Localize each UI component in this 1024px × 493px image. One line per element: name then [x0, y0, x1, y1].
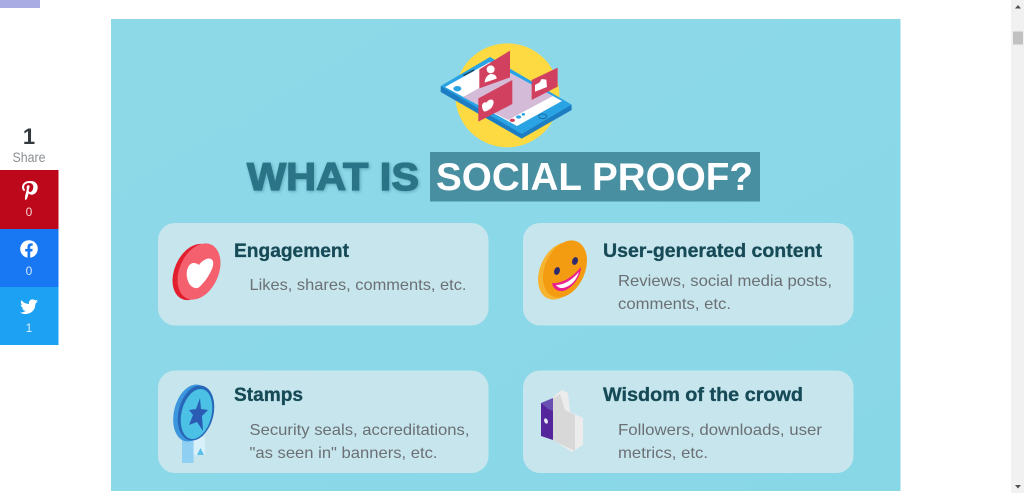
share label: Share: [12, 150, 46, 165]
wisdom of the crowd heading: Wisdom of the crowd: [603, 385, 803, 406]
twitter button: 1: [26, 321, 33, 335]
icon: heart coin: [164, 237, 229, 307]
scrollbar: [1011, 0, 1024, 493]
top-left page bar: [0, 0, 40, 8]
icon: thumbs up: [541, 390, 583, 452]
panel: wisdom of the crowd: [523, 370, 854, 473]
stamps description: Security seals, accreditations,: [250, 422, 470, 439]
stamps heading: Stamps: [234, 385, 303, 406]
panel: user-generated content: [523, 223, 854, 326]
share sidebar: [0, 124, 58, 345]
wisdom of the crowd description: [618, 422, 823, 462]
title: social proof highlight: SOCIAL PROOF?: [436, 156, 753, 199]
title: what is: WHAT IS: [247, 156, 419, 199]
stamps description: [250, 422, 470, 462]
facebook button: 0: [26, 264, 33, 278]
pinterest button: 0: [26, 205, 33, 219]
wisdom of the crowd description: metrics, etc.: [618, 445, 708, 462]
engagement heading: Engagement: [234, 241, 350, 262]
share count: 1: [23, 124, 35, 149]
user-generated content description: comments, etc.: [618, 296, 731, 313]
user-generated content description: [618, 273, 832, 313]
title: [247, 152, 760, 202]
icon: phone with social cards: [441, 43, 572, 147]
icon: smiley coin: [530, 233, 595, 307]
facebook button: [0, 229, 58, 287]
user-generated content description: Reviews, social media posts,: [618, 273, 832, 290]
infographic panel: [111, 19, 900, 491]
panel: stamps: [158, 370, 488, 473]
stamps description: "as seen in" banners, etc.: [250, 445, 438, 462]
title: what is: WHAT IS: [248, 157, 420, 200]
pinterest button: [0, 170, 58, 229]
engagement description: Likes, shares, comments, etc.: [250, 277, 466, 294]
panel: engagement: [158, 223, 488, 326]
user-generated content heading: User-generated content: [603, 241, 823, 262]
icon: stamp badge: [168, 381, 220, 463]
twitter button: [0, 287, 58, 345]
wisdom of the crowd description: Followers, downloads, user: [618, 422, 823, 439]
